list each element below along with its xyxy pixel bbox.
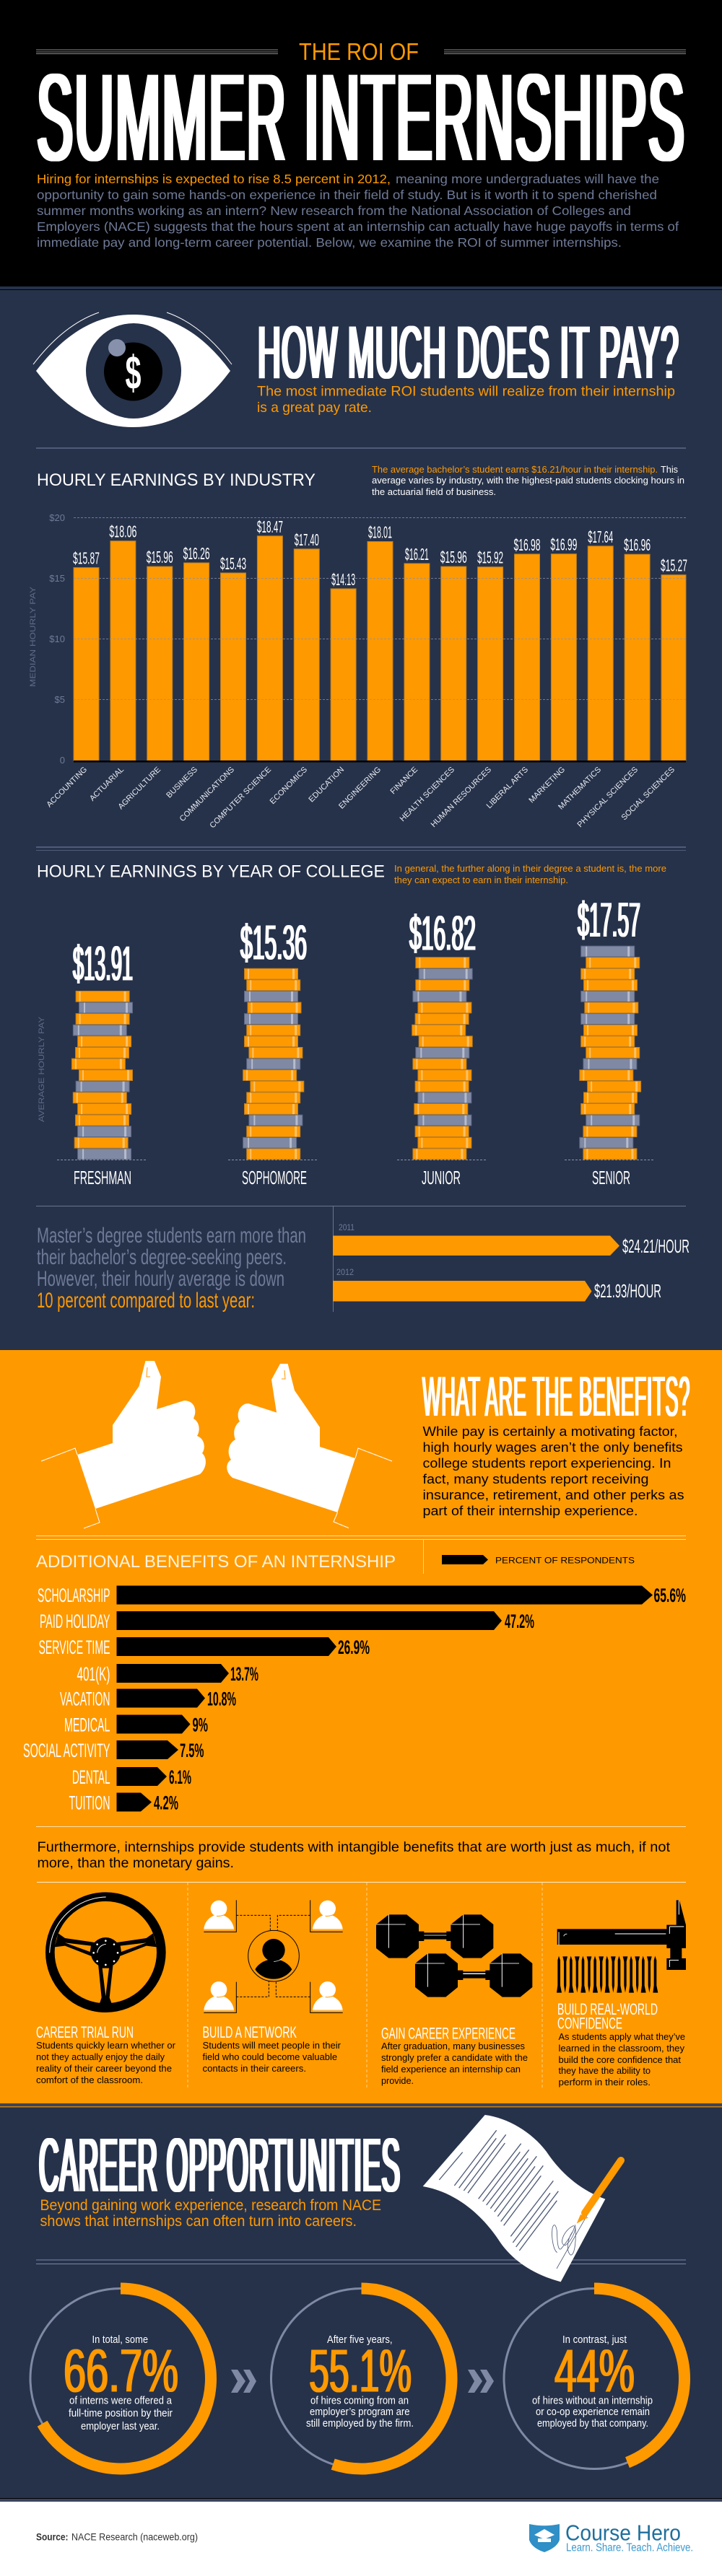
year labels: FRESHMAN — [74, 1167, 131, 1188]
subheading: The most immediate ROI students will realize from their internship — [257, 384, 675, 400]
category labels: MARKETING — [527, 766, 567, 805]
circle stat: 44% — [504, 2289, 684, 2469]
column: build real-world confidence: perform in their roles. — [559, 2077, 651, 2087]
column: build real-world confidence: CONFIDENCE — [557, 2015, 622, 2032]
column: career trial run: Students quickly learn whether or — [36, 2040, 176, 2051]
icon: dumbbells — [376, 1914, 532, 1997]
bars — [117, 1586, 653, 1811]
text block: industry note: The average bachelor’s student earns $16.21/hour in their internship. — [372, 464, 658, 475]
bar labels: 401(K) — [77, 1663, 110, 1685]
category labels: COMPUTER SCIENCE — [208, 766, 273, 830]
panel: footer — [0, 2498, 722, 2576]
bar chart: hourly earnings by industry — [29, 512, 687, 830]
source: Source: — [36, 2531, 68, 2543]
bar labels: DENTAL — [72, 1766, 110, 1788]
intro paragraph: Employers (NACE) suggests that the hours spent at an internship can actually have huge payoffs in terms of — [37, 219, 679, 234]
bar values: 13.7% — [230, 1663, 258, 1685]
circle stat: 66.7%: of interns were offered a — [69, 2394, 173, 2407]
bars — [74, 536, 686, 761]
y axis ticks: $15 — [49, 573, 65, 584]
column: career trial run — [36, 2023, 176, 2085]
legend — [442, 1555, 635, 1566]
arrow chart: master's pay: $21.93/HOUR — [594, 1280, 661, 1302]
category labels: HEALTH SCIENCES — [399, 766, 456, 823]
bar value labels: $16.26 — [183, 544, 210, 563]
bar value labels: $15.43 — [220, 554, 246, 573]
circle stat: 66.7%: employer last year. — [81, 2420, 160, 2432]
circle stat: 55.1%: 55.1% — [309, 2336, 412, 2404]
column: build real-world confidence: As students apply what they’ve — [559, 2031, 685, 2042]
arrow chart: master's pay — [333, 1222, 690, 1302]
text block: year note: In general, the further along in their degree a student is, the more — [394, 863, 666, 874]
category labels: COMMUNICATIONS — [178, 766, 236, 823]
column: build a network — [202, 2023, 342, 2074]
text block: year note: they can expect to earn in their internship. — [394, 875, 568, 885]
intro paragraph: Hiring for internships is expected to rise 8.5 percent in 2012, — [37, 172, 391, 186]
panel: what are the benefits — [0, 1350, 722, 2103]
bar value labels: $15.27 — [661, 556, 687, 575]
category labels: LIBERAL ARTS — [485, 766, 530, 810]
bar values: 65.6% — [654, 1585, 686, 1606]
category labels: SOCIAL SCIENCES — [619, 766, 677, 822]
text block: furthermore: Furthermore, internships provide students with intangible benefits that are worth just as much, if not — [38, 1840, 671, 1855]
text block: benefits intro: high hourly wages aren’t the only benefits — [423, 1440, 683, 1455]
intro paragraph — [37, 172, 679, 250]
column: gain career experience: provide. — [381, 2075, 414, 2086]
icon: contract and pen — [423, 2115, 621, 2282]
axis title: MEDIAN HOURLY PAY — [29, 586, 38, 687]
bar labels: PAID HOLIDAY — [40, 1611, 110, 1632]
source: NACE Research (naceweb.org) — [71, 2531, 198, 2543]
column: build a network: field who could become valuable — [202, 2051, 337, 2062]
bar value labels: $16.21 — [405, 545, 429, 564]
bar value labels: $16.98 — [514, 535, 540, 554]
category labels: BUSINESS — [165, 766, 199, 799]
axis title: AVERAGE HOURLY PAY — [38, 1016, 46, 1122]
bar labels: TUITION — [69, 1792, 110, 1814]
text block: master's degree: Master’s degree students earn more than — [37, 1224, 306, 1248]
circle stat: 66.7%: In total, some — [92, 2334, 148, 2346]
text block: benefits intro: part of their internship experience. — [423, 1504, 638, 1518]
price labels: $15.36 — [240, 915, 307, 970]
category labels: ECONOMICS — [269, 766, 309, 806]
column: career trial run: comfort of the classroom. — [36, 2075, 143, 2085]
subheading: shows that internships can often turn into careers. — [40, 2213, 357, 2230]
bar value labels: $15.96 — [440, 548, 467, 566]
panel: header — [0, 0, 722, 287]
circle stat: 44%: In contrast, just — [562, 2334, 627, 2346]
circle stat: 66.7%: full-time position by their — [69, 2407, 173, 2419]
arrow chart: master's pay: 2011 — [339, 1222, 355, 1232]
bar labels: SOCIAL ACTIVITY — [23, 1740, 110, 1761]
book stack: freshman — [71, 991, 133, 1160]
column: career trial run: reality of their career beyond the — [36, 2063, 172, 2074]
price labels: $13.91 — [73, 937, 133, 991]
category labels — [45, 766, 677, 830]
circle stat: 55.1%: employer’s program are — [310, 2406, 410, 2418]
circle stat: 44%: of hires without an internship — [532, 2394, 653, 2407]
bar value labels: $17.64 — [588, 527, 613, 546]
category labels: ACTUARIAL — [88, 766, 126, 803]
circle stat: 44%: employed by that company. — [537, 2417, 648, 2430]
bar labels — [23, 1585, 110, 1814]
bar value labels: $16.99 — [550, 535, 577, 554]
bar value labels — [73, 517, 687, 589]
category labels: AGRICULTURE — [116, 766, 162, 811]
bar values — [154, 1585, 686, 1814]
bar value labels: $18.01 — [368, 522, 392, 541]
logo: course hero: Course Hero — [565, 2520, 681, 2546]
price labels: $16.82 — [409, 906, 476, 961]
text block: industry note: This — [661, 464, 678, 475]
logo: course hero — [529, 2520, 693, 2554]
icon: eye with dollar pupil: $ — [126, 346, 142, 399]
heading: hourly earnings by industry: HOURLY EARNINGS BY INDUSTRY — [37, 470, 316, 490]
column: build real-world confidence: learned in the classroom, they — [559, 2043, 684, 2054]
icon: thumbs up right — [227, 1364, 392, 1528]
icon: network — [204, 1900, 343, 2012]
bar values: 7.5% — [180, 1740, 204, 1761]
text block: benefits intro: While pay is certainly a motivating factor, — [423, 1424, 677, 1439]
text block: master's degree: their bachelor’s degree-seeking peers. — [37, 1245, 287, 1269]
y axis ticks — [49, 512, 65, 766]
category labels: FINANCE — [388, 766, 419, 796]
category labels: PHYSICAL SCIENCES — [576, 766, 640, 829]
bar values: 9% — [192, 1714, 208, 1736]
column: gain career experience: GAIN CAREER EXPERIENCE — [381, 2025, 516, 2042]
subheading — [40, 2197, 381, 2230]
icon: eye with dollar pupil — [33, 312, 232, 427]
kicker: the ROI of: THE ROI OF — [299, 38, 419, 65]
bar values: 10.8% — [207, 1688, 236, 1710]
subheading: is a great pay rate. — [257, 400, 372, 416]
y axis ticks: $5 — [55, 694, 65, 705]
text block: industry note: the actuarial field of business. — [372, 486, 496, 497]
bar labels: VACATION — [60, 1688, 110, 1710]
text block: benefits intro: fact, many students report receiving — [423, 1472, 648, 1486]
intro paragraph: opportunity to gain some hands-on experience in their field of study. But is it worth it to spend cherished — [37, 188, 657, 202]
column: build real-world confidence: BUILD REAL-WORLD — [557, 2000, 658, 2018]
price labels — [73, 893, 640, 991]
book stack: sophomore — [243, 968, 304, 1160]
column: gain career experience — [381, 2025, 528, 2086]
bar value labels: $15.87 — [73, 549, 100, 568]
intro paragraph: immediate pay and long-term career potential. Below, we examine the ROI of summer internships. — [37, 235, 622, 250]
bar labels: SCHOLARSHIP — [38, 1585, 110, 1606]
bar value labels: $15.92 — [477, 548, 503, 567]
panel: career opportunities — [0, 2103, 722, 2502]
column: build real-world confidence: they have the ability to — [559, 2065, 651, 2076]
bar value labels: $14.13 — [331, 570, 355, 589]
text block: master's degree: However, their hourly average is down — [37, 1267, 284, 1291]
panel: how much does it pay — [0, 286, 722, 1351]
circle stat: 55.1%: still employed by the firm. — [306, 2417, 414, 2430]
bar value labels: $16.96 — [624, 535, 651, 554]
text block: furthermore: more, than the monetary gains. — [38, 1856, 234, 1871]
column: build real-world confidence: build the core confidence that — [559, 2054, 681, 2065]
category labels: MATHEMATICS — [557, 766, 603, 812]
heading: hourly earnings by year: HOURLY EARNINGS BY YEAR OF COLLEGE — [37, 862, 385, 882]
bar chart: additional benefits — [23, 1585, 686, 1814]
text block: master's degree: 10 percent compared to last year: — [37, 1289, 255, 1313]
book stack: senior — [580, 946, 641, 1160]
bar labels: SERVICE TIME — [39, 1637, 110, 1658]
bar labels: MEDICAL — [64, 1714, 110, 1736]
intro paragraph: meaning more undergraduates will have the — [396, 172, 659, 186]
bar values: 6.1% — [169, 1766, 191, 1788]
bar values: 47.2% — [505, 1611, 534, 1632]
logo: course hero: Learn. Share. Teach. Achieve. — [566, 2541, 693, 2554]
year labels: JUNIOR — [422, 1167, 461, 1188]
text block: year note — [394, 863, 666, 885]
column: build real-world confidence — [557, 2000, 685, 2087]
y axis ticks: $20 — [49, 512, 65, 523]
category labels: EDUCATION — [307, 766, 346, 804]
circle stat: 44%: 44% — [554, 2336, 635, 2404]
column: build a network: contacts in their careers. — [202, 2063, 306, 2074]
text block: furthermore — [38, 1840, 671, 1871]
chevrons — [231, 2370, 256, 2393]
subheading — [257, 384, 675, 416]
year labels: SENIOR — [592, 1167, 630, 1188]
bar value labels: $18.47 — [257, 517, 283, 536]
icon: hammer and nails — [557, 1900, 686, 1993]
bar values: 4.2% — [154, 1792, 178, 1814]
column: career trial run: CAREER TRIAL RUN — [36, 2023, 134, 2041]
text block: industry note: average varies by industry, with the highest-paid students clocking hours in — [372, 475, 684, 486]
column: build a network: Students will meet people in their — [202, 2040, 342, 2051]
chevrons — [468, 2370, 494, 2393]
column: gain career experience: After graduation, many businesses — [381, 2041, 525, 2051]
y axis ticks: 0 — [60, 755, 65, 766]
text block: benefits intro — [423, 1424, 684, 1518]
bar value labels: $18.06 — [109, 522, 136, 541]
intro paragraph: summer months working as an intern? New research from the National Association of Colleges and — [37, 203, 631, 218]
icon: steering wheel — [50, 1897, 161, 2008]
y axis ticks: $10 — [49, 634, 65, 644]
circle stat: 55.1%: After five years, — [327, 2334, 393, 2346]
category labels: HUMAN RESOURCES — [430, 766, 493, 829]
year labels: SOPHOMORE — [242, 1167, 307, 1188]
arrow chart: master's pay: 2012 — [336, 1267, 354, 1277]
category labels: ENGINEERING — [337, 766, 383, 811]
circle stat: 55.1% — [271, 2289, 452, 2469]
category labels: ACCOUNTING — [45, 766, 89, 809]
bar value labels: $15.96 — [147, 548, 173, 566]
bar value labels: $17.40 — [295, 530, 319, 549]
column: career trial run: not they actually enjoy the daily — [36, 2051, 165, 2062]
circle stat: 55.1%: of hires coming from an — [310, 2394, 409, 2407]
circle stat: 66.7%: 66.7% — [64, 2336, 178, 2404]
heading: additional benefits: ADDITIONAL BENEFITS OF AN INTERNSHIP — [36, 1552, 396, 1572]
title rules — [36, 50, 686, 53]
column: gain career experience: field experience an internship can — [381, 2064, 521, 2075]
legend: PERCENT OF RESPONDENTS — [495, 1556, 635, 1566]
text block: benefits intro: insurance, retirement, and other perks as — [423, 1488, 684, 1502]
column: gain career experience: strongly prefer a candidate with the — [381, 2052, 528, 2063]
bar values: 26.9% — [338, 1637, 370, 1658]
icon: thumbs up left — [41, 1361, 206, 1528]
text block: benefits intro: college students report experiencing. In — [423, 1456, 671, 1471]
text block: master's degree — [37, 1224, 306, 1313]
year labels — [74, 1167, 630, 1188]
circle stat: 44%: or co-op experience remain — [536, 2406, 650, 2418]
text block: industry note — [372, 464, 684, 497]
book stack: junior — [412, 958, 472, 1160]
subheading: Beyond gaining work experience, research from NACE — [40, 2197, 381, 2214]
circle stat: 66.7% — [30, 2289, 211, 2469]
column: build a network: BUILD A NETWORK — [202, 2023, 297, 2041]
